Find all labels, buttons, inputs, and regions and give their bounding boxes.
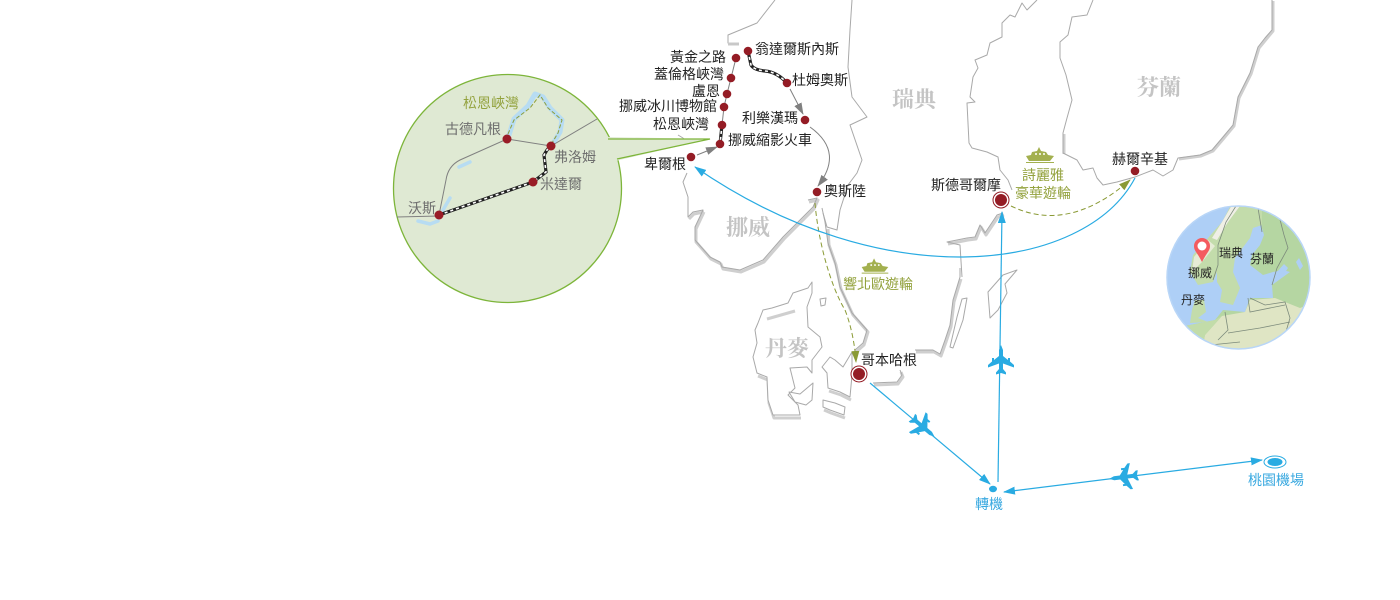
inset scenic railway: [439, 146, 551, 215]
locator labels: 挪威: [1188, 266, 1212, 280]
locator labels: 丹麥: [1181, 293, 1205, 307]
city labels: 挪威縮影火車: [728, 132, 812, 148]
inset labels: 米達爾: [540, 176, 582, 192]
city labels: 利樂漢瑪: [742, 110, 798, 126]
marker: Taoyuan airport: [1264, 456, 1286, 468]
city labels: 哥本哈根: [861, 352, 917, 368]
inset stations: [434, 134, 556, 220]
label: transfer: 轉機: [975, 496, 1003, 512]
callout circle: [394, 74, 622, 302]
routes: scenic railway segments: [720, 51, 787, 144]
map: Norway and Sweden: [678, 0, 1037, 385]
panel: Sognefjord inset callout: [394, 74, 710, 302]
inset labels: 沃斯: [408, 200, 436, 216]
map: Denmark: [753, 282, 852, 418]
city labels: [619, 41, 1168, 368]
locator labels: 瑞典: [1219, 246, 1243, 260]
inset labels: 古德凡根: [445, 121, 501, 137]
icon: location pin: [1194, 238, 1210, 262]
cruise label: Silja Line: [1015, 167, 1071, 201]
city labels: 斯德哥爾摩: [931, 177, 1001, 193]
inset road lines: [397, 119, 597, 217]
route: flight Copenhagen to transfer: [870, 383, 990, 484]
base map of Scandinavia: [678, 0, 1273, 418]
route: flight Taoyuan and transfer: [1004, 460, 1262, 492]
icon: plane over Sweden: [988, 345, 1014, 374]
country label: Finland: 芬蘭: [1137, 75, 1181, 100]
city labels: 挪威冰川博物館: [619, 98, 717, 114]
country label: Sweden: 瑞典: [892, 87, 939, 112]
panel: locator map: [1166, 205, 1311, 350]
inset labels: 松恩峽灣: [463, 95, 519, 111]
route: flight Helsinki to Bergen: [695, 167, 1135, 257]
locator labels: 芬蘭: [1250, 252, 1274, 266]
city labels: 黃金之路: [670, 49, 726, 65]
routes: overland links in Norway: [697, 58, 829, 186]
country label: Norway: 挪威: [726, 215, 770, 240]
map: Finland: [1060, 0, 1273, 185]
cruise label: Northern Europe: 響北歐遊輪: [843, 276, 913, 292]
route: cruise Oslo to Copenhagen: [815, 203, 856, 362]
inset labels: [408, 95, 596, 216]
marker: Stockholm: [993, 192, 1009, 208]
locator rim: [1167, 206, 1310, 349]
callout pointer: [606, 137, 710, 161]
city labels: 蓋倫格峽灣: [654, 66, 724, 82]
marker: transfer point: [989, 486, 997, 492]
city labels: 奧斯陸: [824, 183, 866, 199]
locator sea: [1166, 206, 1310, 350]
inset labels: 弗洛姆: [554, 149, 596, 165]
icon: plane toward Taoyuan: [1108, 462, 1140, 492]
map: Oland and Gotland islands: [950, 270, 1017, 348]
city labels: 盧恩: [692, 83, 720, 99]
marker: Copenhagen: [851, 366, 867, 382]
stations: Norway stops: [687, 47, 1139, 196]
city labels: 赫爾辛基: [1112, 151, 1168, 167]
locator land: [1186, 206, 1310, 348]
inset fjord ferry route: [508, 95, 562, 143]
city labels: 卑爾根: [644, 156, 686, 172]
icon: plane near Copenhagen: [904, 408, 943, 447]
city labels: 杜姆奧斯: [792, 72, 848, 88]
label: Taoyuan airport: 桃園機場: [1248, 472, 1304, 488]
country label: Denmark: 丹麥: [765, 336, 809, 361]
route: flight transfer to Stockholm: [998, 212, 1002, 482]
icon: ship to Helsinki: [1026, 147, 1054, 163]
cruise label: Silja Line: 詩麗雅: [1022, 167, 1064, 183]
city labels: 松恩峽灣: [653, 116, 709, 132]
inset water: [418, 94, 562, 224]
route: cruise Stockholm to Helsinki: [1011, 180, 1130, 215]
icon: ship to Copenhagen: [862, 258, 888, 274]
city labels: 翁達爾斯內斯: [755, 41, 839, 57]
cruise label: Silja Line: 豪華遊輪: [1015, 185, 1071, 201]
locator labels: [1181, 246, 1274, 307]
